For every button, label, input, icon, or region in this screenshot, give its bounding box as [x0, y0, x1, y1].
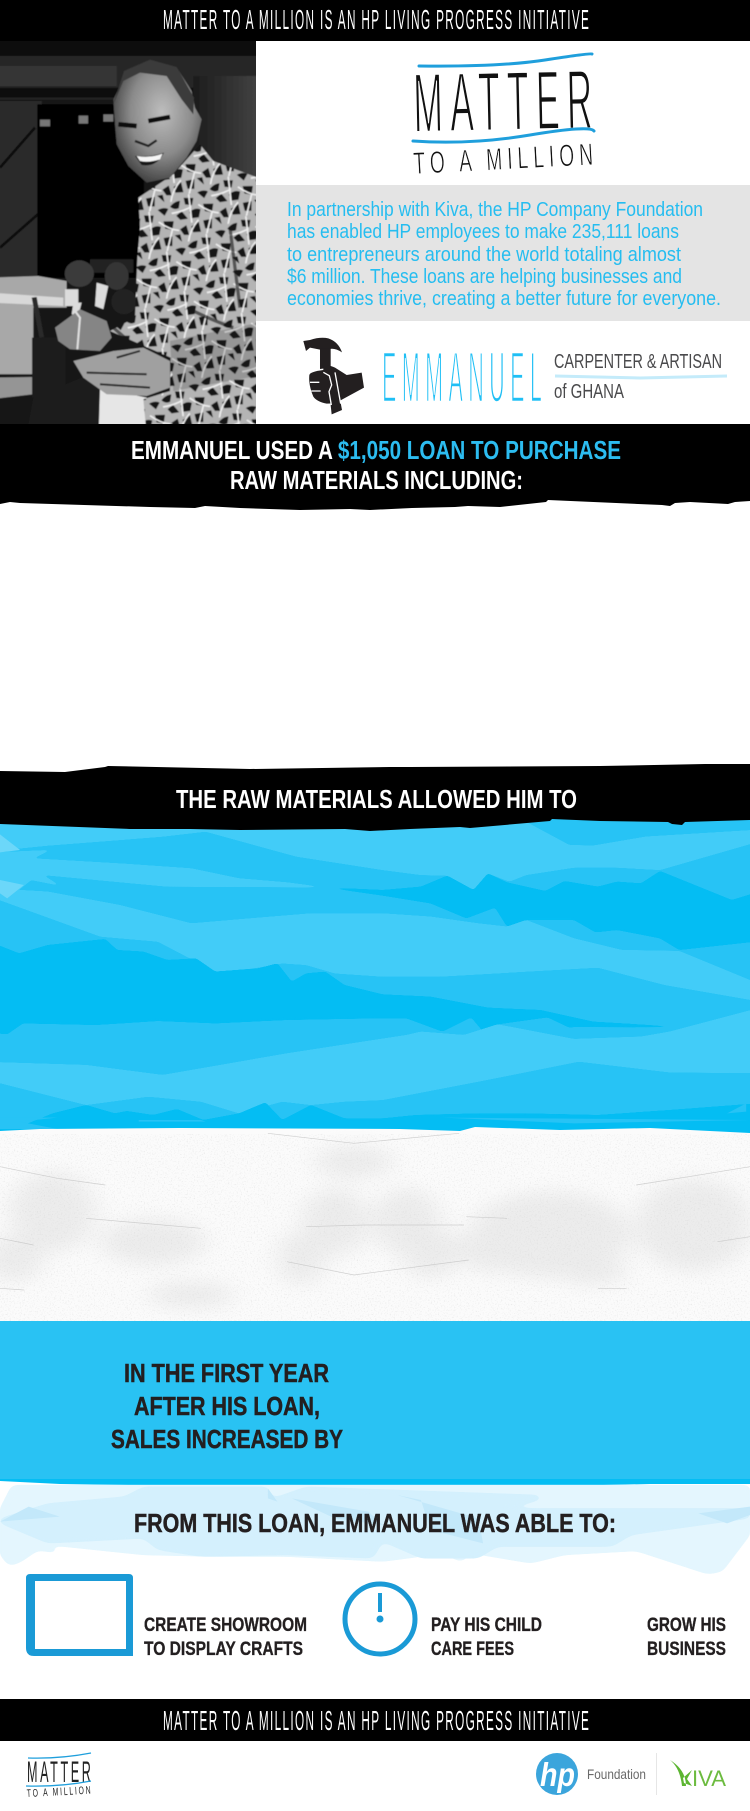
logo: Kiva: IVA	[692, 1766, 726, 1791]
intro paragraph: $6 million. These loans are helping businesses and	[287, 266, 682, 288]
able-to headline: FROM THIS LOAN, EMMANUEL WAS ABLE TO:	[134, 1508, 616, 1538]
darker torn edge	[0, 1479, 750, 1487]
showroom label: CREATE SHOWROOM	[144, 1614, 307, 1636]
head	[113, 60, 202, 183]
light blue painted panel	[0, 1485, 750, 1574]
footer logo: Matter to a Million: TO A MILLION	[26, 1784, 91, 1799]
child care label	[431, 1614, 542, 1660]
item: grow his business	[647, 1614, 726, 1660]
sales text: AFTER HIS LOAN,	[134, 1391, 320, 1421]
logo: Kiva	[670, 1760, 726, 1791]
main light stroke	[0, 888, 750, 1003]
top banner text: MATTER TO A MILLION IS AN HP LIVING PROGRESS INITIATIVE	[163, 4, 589, 36]
texture blotches	[0, 1145, 750, 1308]
icon: clock circle	[345, 1584, 415, 1654]
child care label: CARE FEES	[431, 1638, 514, 1660]
loan headline line two: RAW MATERIALS INCLUDING:	[230, 465, 523, 495]
showroom label	[144, 1614, 307, 1660]
logo: Matter to a Million	[412, 53, 594, 181]
occupation label	[554, 351, 722, 403]
logo words TO A MILLION: TO A MILLION	[413, 138, 594, 181]
lower light stroke	[0, 1005, 750, 1113]
top light stroke	[0, 812, 750, 890]
loan headline: EMMANUEL USED A $1,050 LOAN TO PURCHASE	[131, 435, 621, 465]
bottom banner	[0, 1699, 750, 1741]
footer logo: Matter to a Million: MATTER	[27, 1755, 91, 1789]
showroom label: TO DISPLAY CRAFTS	[144, 1638, 303, 1660]
dark stroke right	[325, 871, 750, 950]
texture cracks	[0, 1133, 750, 1290]
item: grow his business: BUSINESS	[647, 1638, 726, 1660]
dark stroke left	[0, 938, 689, 1034]
shirt	[110, 145, 256, 424]
raw materials headline: THE RAW MATERIALS ALLOWED HIM TO	[176, 784, 577, 814]
logo: HP Foundation	[536, 1753, 646, 1795]
bottom streaks	[0, 1103, 750, 1129]
bottom banner text: MATTER TO A MILLION IS AN HP LIVING PROGRESS INITIATIVE	[163, 1705, 589, 1737]
intro paragraph	[287, 199, 721, 310]
sales text: SALES INCREASED BY	[111, 1424, 343, 1454]
item: grow his business: GROW HIS	[647, 1614, 726, 1636]
item: create showroom	[26, 1574, 307, 1660]
black banner: raw materials	[0, 764, 750, 831]
Foundation wordmark: Foundation	[587, 1766, 646, 1782]
HP mark: hp	[540, 1756, 575, 1793]
concrete texture panel	[0, 1127, 750, 1322]
top banner	[0, 0, 750, 41]
hands	[55, 309, 112, 351]
origin text: of GHANA	[554, 381, 624, 403]
logo word MATTER: MATTER	[412, 53, 593, 150]
blue panel: sales increase	[0, 1321, 750, 1487]
intro paragraph: to entrepreneurs around the world totaling almost	[287, 244, 681, 266]
intro panel	[256, 185, 750, 321]
logo upper blue stroke	[419, 54, 592, 66]
sales text	[111, 1358, 343, 1454]
logo lower blue stroke	[413, 129, 594, 142]
name: Emmanuel: EMMANUEL	[382, 338, 542, 418]
portrait photo of Emmanuel	[0, 31, 267, 438]
bottom dark stroke	[0, 1102, 750, 1133]
child care label: PAY HIS CHILD	[431, 1614, 542, 1636]
icon: showroom frame	[26, 1574, 133, 1656]
black banner: loan	[0, 424, 750, 510]
icon: hand holding hammer	[303, 338, 364, 414]
blue painted panel	[0, 812, 750, 1133]
intro paragraph: has enabled HP employees to make 235,111 loans	[287, 221, 679, 243]
intro paragraph: In partnership with Kiva, the HP Company Foundation	[287, 199, 703, 221]
sales text: IN THE FIRST YEAR	[124, 1358, 329, 1388]
item: pay child care fees	[345, 1584, 542, 1660]
